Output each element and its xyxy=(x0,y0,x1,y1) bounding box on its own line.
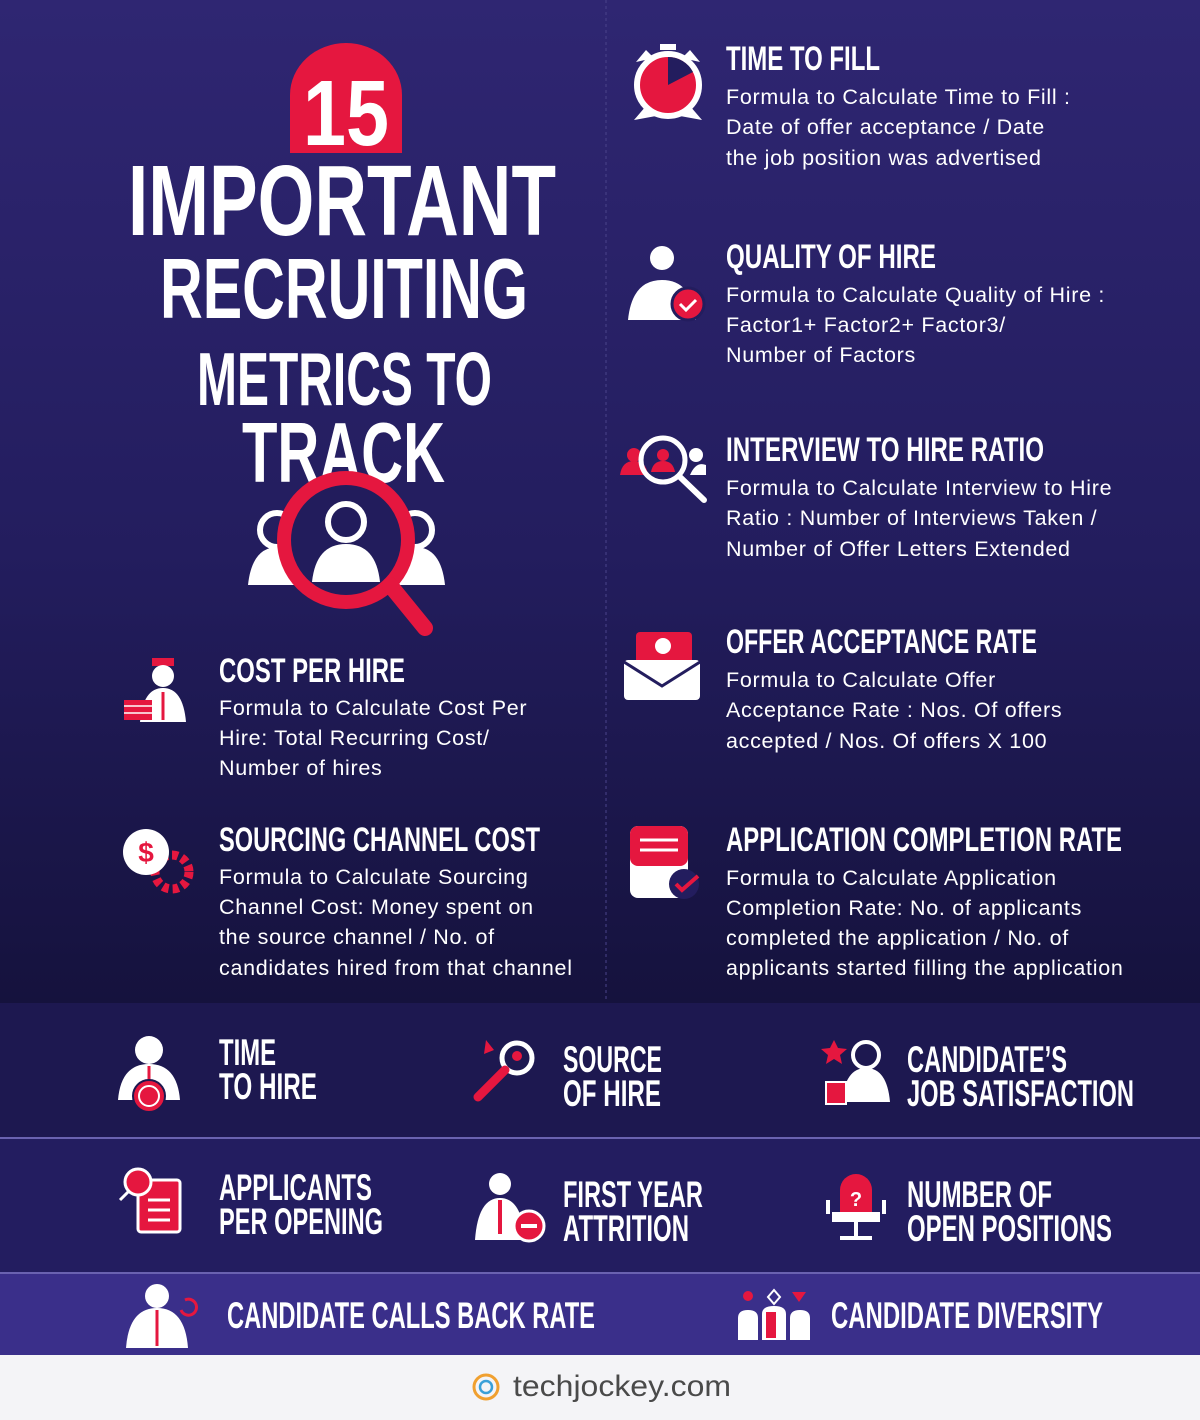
item: quality of hire: Factor1+ Factor2+ Factor3/ xyxy=(726,313,1006,337)
band row 2 xyxy=(0,1139,1200,1274)
item: time to fill: the job position was advertised xyxy=(726,146,1042,170)
metric: time to hire: TIME xyxy=(219,1032,276,1073)
metric: number of open positions xyxy=(828,1174,1112,1249)
item: offer acceptance rate xyxy=(624,623,1062,753)
item: sourcing channel cost: Formula to Calculate Sourcing xyxy=(219,865,528,889)
band row 1 xyxy=(0,1003,1200,1139)
item: time to fill: TIME TO FILL xyxy=(726,40,880,78)
metric: time to hire xyxy=(118,1032,317,1112)
metric: first year attrition: FIRST YEAR xyxy=(563,1174,703,1215)
item: cost per hire: Number of hires xyxy=(219,756,382,780)
item: application completion rate: applicants started filling the application xyxy=(726,956,1124,980)
heading: METRICS TO: METRICS TO xyxy=(197,337,492,421)
metric: first year attrition: ATTRITION xyxy=(563,1208,689,1249)
metric: first year attrition xyxy=(475,1173,703,1249)
icon: search people xyxy=(620,438,706,500)
band row 3 xyxy=(0,1274,1200,1355)
metric: candidate's job satisfaction xyxy=(821,1039,1134,1114)
item: time to fill: Date of offer acceptance / Date xyxy=(726,115,1045,139)
metric: applicants per opening: APPLICANTS xyxy=(219,1167,372,1208)
item: cost per hire: Formula to Calculate Cost Per xyxy=(219,696,527,720)
icon: form check xyxy=(630,826,699,899)
icon: stopwatch xyxy=(634,44,702,120)
item: offer acceptance rate: Formula to Calculate Offer xyxy=(726,668,996,692)
heading: TRACK: TRACK xyxy=(242,406,445,501)
footer: techjockey.com xyxy=(513,1370,731,1403)
item: quality of hire: Formula to Calculate Quality of Hire : xyxy=(726,283,1105,307)
item: application completion rate xyxy=(630,821,1124,980)
item: application completion rate: Formula to Calculate Application xyxy=(726,866,1057,890)
item: interview to hire ratio: Formula to Calculate Interview to Hire xyxy=(726,476,1112,500)
item: interview to hire ratio: Number of Offer Letters Extended xyxy=(726,537,1071,561)
item: interview to hire ratio xyxy=(620,431,1112,561)
icon: envelope letter xyxy=(624,632,700,700)
metric: number of open positions: ? xyxy=(850,1189,862,1211)
icon: dollar gear: $ xyxy=(138,837,154,868)
item: sourcing channel cost: candidates hired from that channel xyxy=(219,956,573,980)
icon: magnifier with people xyxy=(248,478,445,628)
icon: person check xyxy=(628,246,704,320)
item: cost per hire: Hire: Total Recurring Cost/ xyxy=(219,726,490,750)
metric: candidate calls back rate: CANDIDATE CALLS BACK RATE xyxy=(227,1295,595,1336)
item: offer acceptance rate: OFFER ACCEPTANCE RATE xyxy=(726,623,1037,661)
item: sourcing channel cost: Channel Cost: Money spent on xyxy=(219,895,534,919)
metric: candidate's job satisfaction: CANDIDATE’S xyxy=(907,1039,1067,1080)
item: time to fill xyxy=(634,40,1071,170)
metric: number of open positions: NUMBER OF xyxy=(907,1174,1052,1215)
item: cost per hire: COST PER HIRE xyxy=(219,652,405,690)
item: quality of hire: QUALITY OF HIRE xyxy=(726,238,936,276)
item: interview to hire ratio: Ratio : Number of Interviews Taken / xyxy=(726,506,1097,530)
title block xyxy=(128,43,556,501)
metric: applicants per opening: PER OPENING xyxy=(219,1201,383,1242)
metric: source of hire xyxy=(478,1039,662,1114)
item: application completion rate: completed the application / No. of xyxy=(726,926,1069,950)
icon: dollar gear xyxy=(123,829,189,889)
item: time to fill: Formula to Calculate Time to Fill : xyxy=(726,85,1071,109)
item: quality of hire xyxy=(628,238,1105,367)
metric: candidate diversity xyxy=(738,1290,1103,1340)
heading: RECRUITING: RECRUITING xyxy=(160,242,528,337)
metric: applicants per opening xyxy=(120,1167,383,1242)
item: application completion rate: Completion Rate: No. of applicants xyxy=(726,896,1082,920)
item: interview to hire ratio: INTERVIEW TO HIRE RATIO xyxy=(726,431,1044,469)
item: sourcing channel cost xyxy=(123,821,573,980)
item: offer acceptance rate: accepted / Nos. Of offers X 100 xyxy=(726,729,1047,753)
item: sourcing channel cost: the source channel / No. of xyxy=(219,925,495,949)
item: sourcing channel cost: SOURCING CHANNEL COST xyxy=(219,821,540,859)
footer xyxy=(0,1355,1200,1420)
icon: person with money xyxy=(124,658,186,722)
metric: source of hire: OF HIRE xyxy=(563,1073,661,1114)
item: offer acceptance rate: Acceptance Rate : Nos. Of offers xyxy=(726,698,1062,722)
metric: time to hire: TO HIRE xyxy=(219,1066,317,1107)
item: quality of hire: Number of Factors xyxy=(726,343,916,367)
metric: candidate calls back rate xyxy=(126,1284,595,1348)
heading: IMPORTANT: IMPORTANT xyxy=(128,145,556,257)
metric: source of hire: SOURCE xyxy=(563,1039,662,1080)
item: cost per hire xyxy=(124,652,527,780)
icon: logo xyxy=(474,1375,498,1399)
badge: 15: 15 xyxy=(303,61,389,165)
